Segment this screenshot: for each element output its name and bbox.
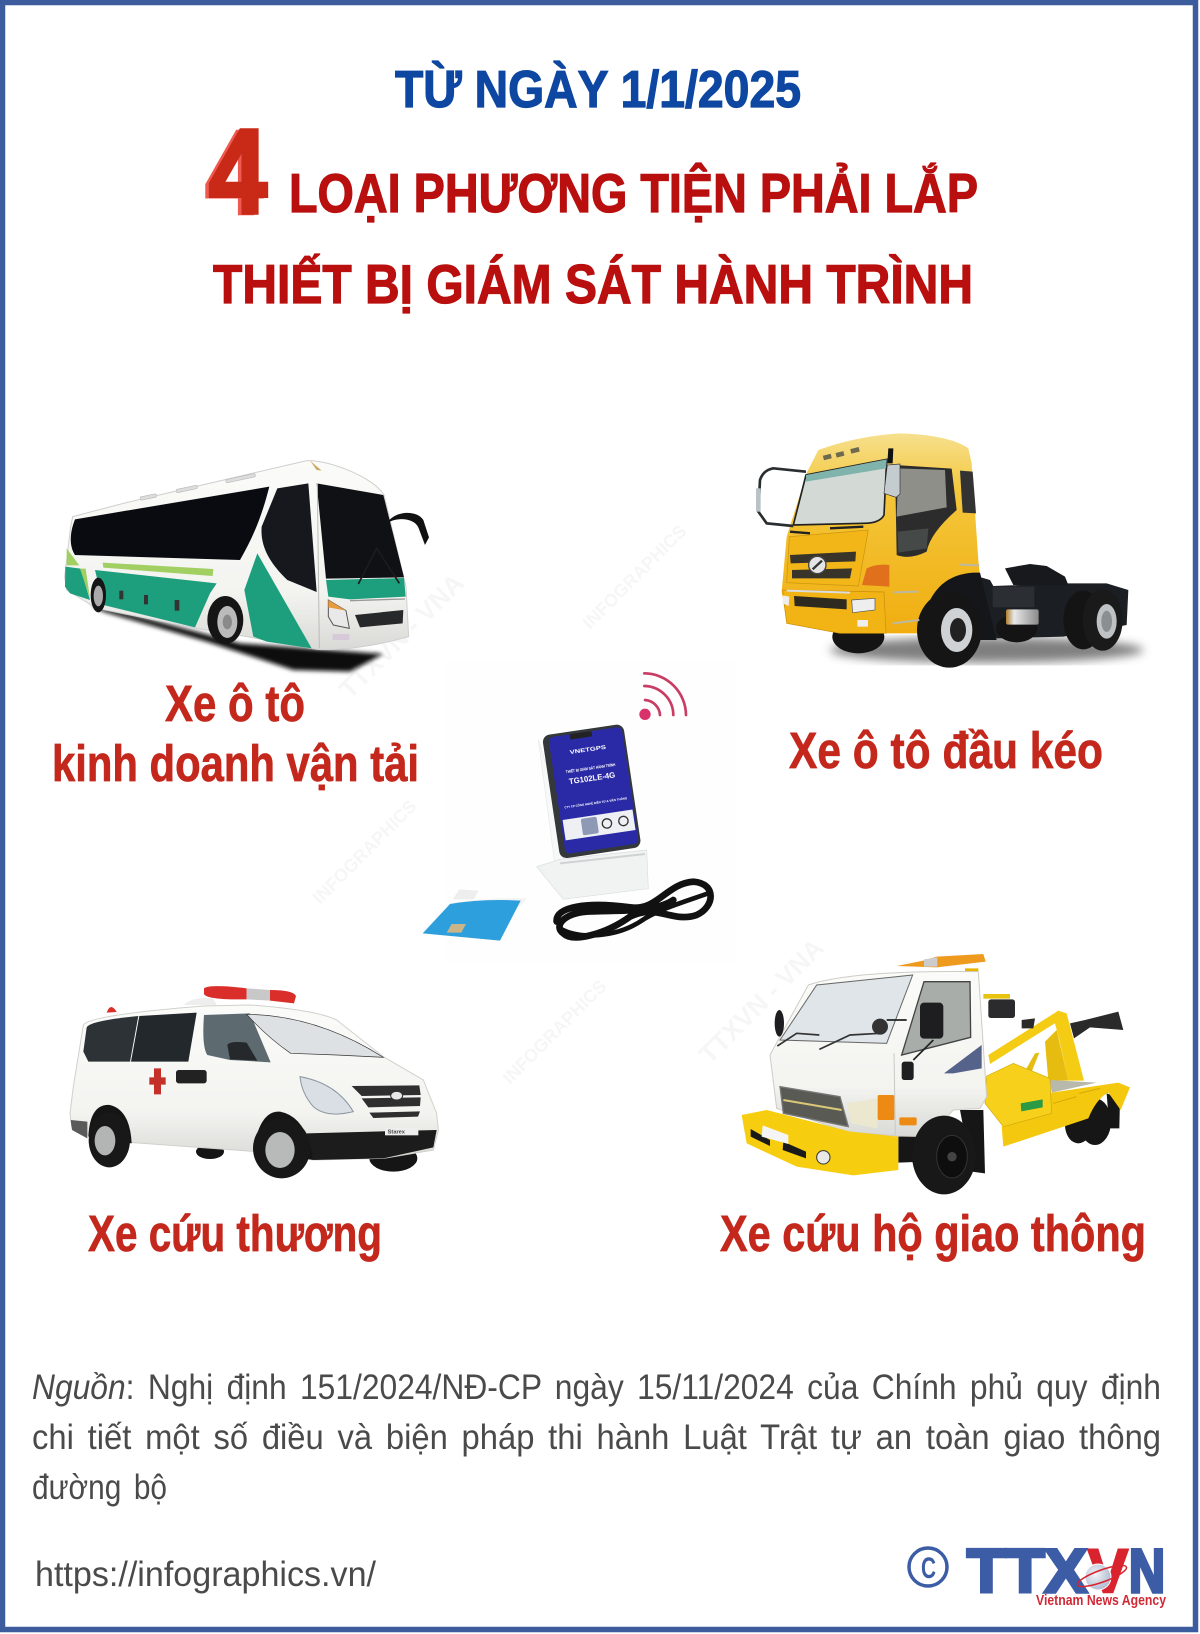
tractor cab [782,433,980,633]
tractor chassis [978,577,1128,638]
coach shadow [90,603,383,672]
tow headlight [847,1095,917,1128]
coach wheels [91,578,243,644]
number plate [385,1128,418,1136]
device white panel [563,810,636,840]
coach body [65,461,409,650]
device label text: CTY CP CÔNG NGHỆ ĐIỆN TỬ & VIỄN THÔNG [564,795,628,810]
title: date line: TỪ NGÀY 1/1/2025 [395,61,801,119]
tractor tank [1006,609,1039,625]
agency wordmark [967,1537,1165,1605]
tow livery stripes [944,1045,982,1073]
tow door window [902,982,971,1055]
tow boom [988,1011,1123,1081]
numeral 4: 4 [209,105,267,239]
device label text: TG102LE-4G [568,770,616,786]
ambulance headlight [300,1077,353,1114]
copyright symbol [909,1548,947,1586]
tractor wheel arch [920,573,997,640]
sim card [423,889,527,941]
tow rear wheels [1065,1093,1120,1145]
numeral 4: 4 [205,106,263,240]
website url: https://infographics.vn/ [35,1555,376,1594]
logo: TTXVN [909,1537,1166,1609]
tractor windshield [793,459,887,525]
tow windshield [780,975,913,1043]
ambulance grille [352,1085,421,1118]
vehicle: ambulance [70,986,438,1178]
tractor fifth wheel [1005,564,1068,585]
tractor roof vents [823,447,860,460]
ambulance windshield [247,1014,383,1057]
tractor front wheel [917,592,982,668]
title: line 2: THIẾT BỊ GIÁM SÁT HÀNH TRÌNH [213,253,973,315]
door handle [176,1070,207,1083]
tractor mirrors [756,448,900,526]
cable coil [557,882,711,937]
tagline: Vietnam News Agency [1036,1593,1166,1609]
monitoring device [423,660,737,963]
ambulance door window [203,1013,271,1062]
tow work lamp [983,994,1015,1018]
coach windshield [317,483,404,579]
tractor rear wheels [996,589,1123,651]
ambulance wheels [88,1105,313,1178]
label: coach: Xe ô tô [165,675,305,732]
ambulance front bumper [307,1130,437,1160]
tractor left front wheel [832,620,884,653]
tractor battery box [993,587,1034,607]
tracker unit [542,724,641,859]
title block [205,61,978,315]
watermarks: TTXVN - VNA [333,567,470,704]
agency wordmark: V [1088,1537,1128,1605]
globe emblem [1076,1561,1128,1591]
ambulance body [70,1005,438,1160]
watermarks: INFOGRAPHICS [579,521,690,633]
tow cab [770,971,987,1137]
label: coach: kinh doanh vận tải [52,735,419,792]
tow front wheel [912,1116,976,1194]
ambulance wing mirror [227,1042,257,1061]
tow flat bed [985,1063,1130,1147]
ambulance rear windows [83,1016,138,1062]
coach details [119,461,399,611]
vehicle: tractor unit [756,433,1143,668]
tow door seam [894,1053,895,1135]
tractor front panel [787,530,868,586]
faint photo panel [447,660,737,963]
acrylic stand [537,740,648,899]
tow wipers [777,1033,880,1049]
vehicle: tow truck [742,954,1130,1194]
agency wordmark: TTX [967,1537,1087,1605]
source note [32,1368,1161,1507]
coach headlight, grille [317,483,405,648]
agency wordmark: N [1129,1537,1165,1605]
tractor bumper [783,527,979,633]
tow light bar [897,954,986,980]
watermarks: TTXVN - VNA [693,932,830,1069]
device label text [556,743,628,810]
far-side wheels [196,1144,417,1172]
coach side windows [71,487,269,560]
tow grille [780,1087,848,1127]
wifi signal icon [639,673,686,720]
coach lime stripes [67,548,213,598]
tow mirrors [775,1003,943,1080]
watermarks: INFOGRAPHICS [309,796,420,908]
source note: đường bộ [32,1468,167,1507]
label: ambulance: Xe cứu thương [88,1205,382,1262]
tow under-cab [898,1110,985,1173]
watermarks [309,521,830,1088]
roof light bar [107,986,296,1013]
device label text: THIẾT BỊ GIÁM SÁT HÀNH TRÌNH [565,762,616,774]
tractor rear window [960,471,976,513]
ambulance rear bumper [71,1120,87,1138]
red cross icon [149,1068,166,1094]
tractor shadow [830,637,1143,663]
tractor door window [895,465,957,557]
label: coach [52,675,419,792]
tractor grille [790,552,889,587]
device label text: VNETGPS [569,745,607,756]
copyright symbol: C [921,1552,936,1585]
vehicle: passenger coach [65,461,429,672]
coach door window [261,483,317,592]
label: tractor: Xe ô tô đầu kéo [789,722,1103,779]
coach green livery [65,553,406,648]
number plate: Starex [388,1130,406,1136]
watermarks: INFOGRAPHICS [499,976,610,1088]
title: line 1: LOẠI PHƯƠNG TIỆN PHẢI LẮP [289,162,978,224]
tow bumper [742,1110,898,1175]
coach mirror [387,513,429,545]
